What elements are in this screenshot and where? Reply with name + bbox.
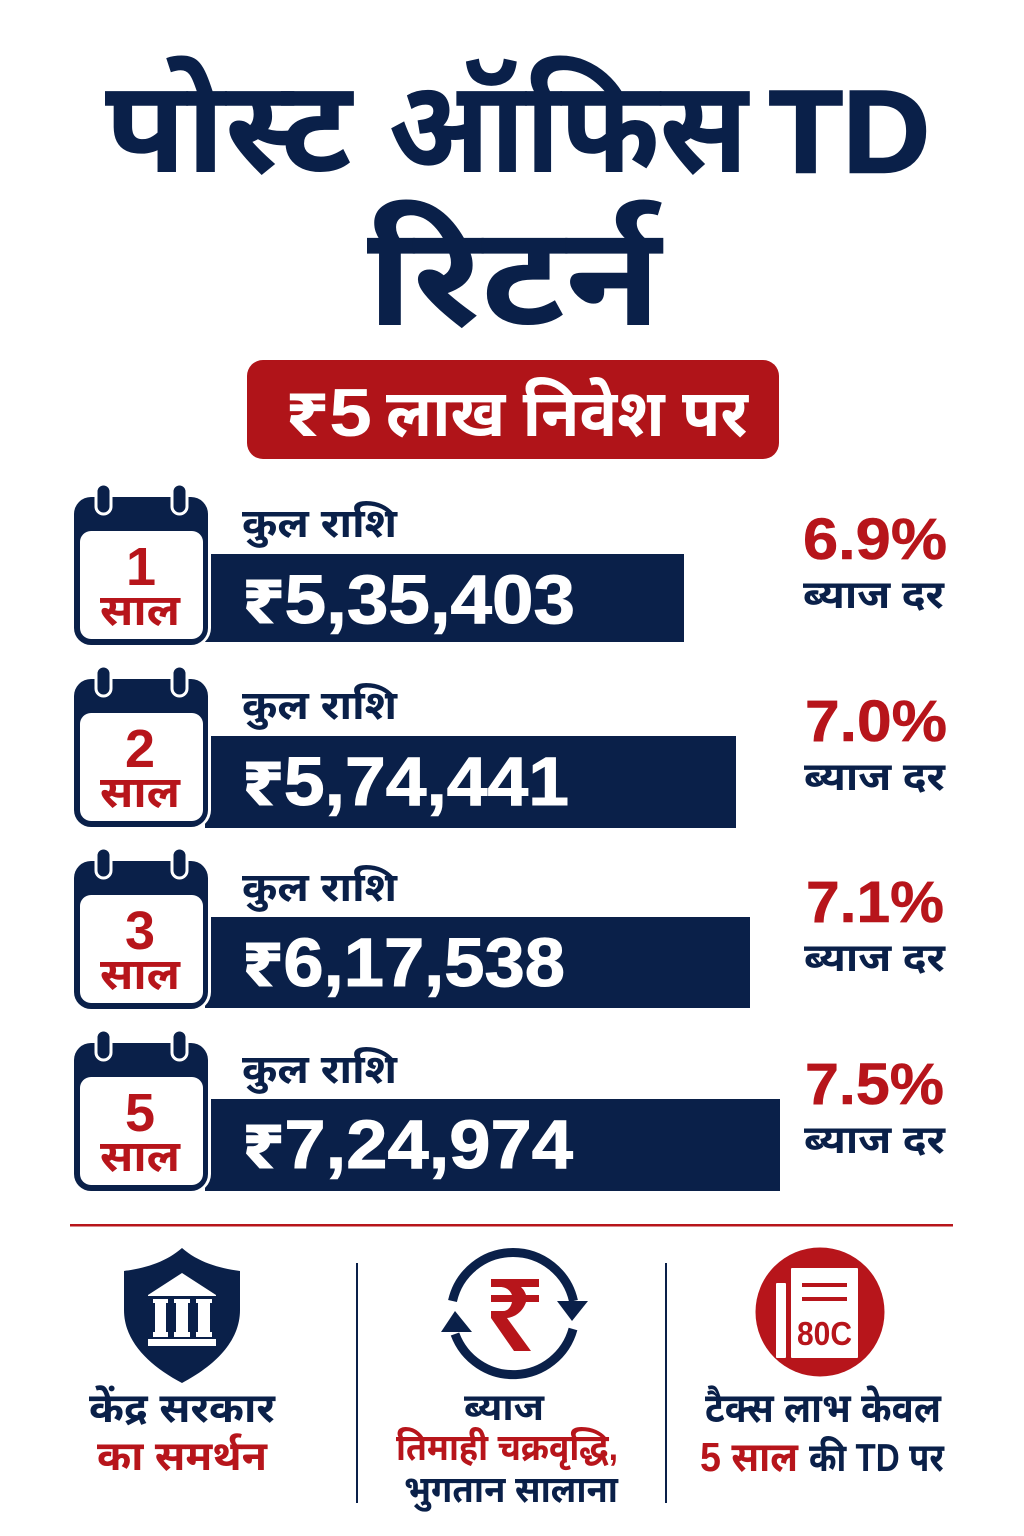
icon: calendar 1 year: [72, 484, 211, 647]
label: total amount: कुल राशि: [242, 865, 398, 912]
rate: 6.9 percent: 6.9%: [803, 507, 947, 572]
badge: investment amount: [247, 360, 779, 459]
rate: 7.0 percent: 7.0%: [805, 689, 947, 754]
rate: 6.9 percent: [803, 507, 947, 617]
icon: calendar 2 years: 2: [125, 719, 155, 779]
icon: 80C document: 80C: [797, 1315, 852, 1352]
bar: 1 year amount: ₹5,35,403: [242, 561, 575, 638]
caption: on 5 year TD: की TD पर: [809, 1436, 945, 1480]
bar: 3 year amount: [205, 917, 750, 1008]
icon: calendar 1 year: साल: [100, 587, 181, 635]
icon: calendar 5 years: 5: [125, 1083, 155, 1143]
row: 3 years: [72, 848, 946, 1011]
label: total amount: कुल राशि: [242, 501, 398, 548]
badge: investment amount: ₹5: [285, 375, 372, 451]
icon: calendar 3 years: साल: [100, 951, 181, 999]
caption: support: का समर्थन: [97, 1433, 268, 1479]
rate: 7.1 percent: ब्याज दर: [804, 937, 946, 980]
row: 1 year: [72, 484, 947, 647]
bar: 2 year amount: [205, 736, 736, 828]
icon: 80C document: [756, 1248, 884, 1376]
title: ऑफिस: [388, 54, 750, 200]
panel: interest compounding: [396, 1253, 619, 1512]
label: total amount: कुल राशि: [242, 1047, 398, 1094]
caption: on 5 year TD: [700, 1434, 945, 1480]
title: रिटर्न: [367, 198, 664, 355]
caption: on 5 year TD: 5 साल: [700, 1434, 799, 1480]
rate: 7.5 percent: ब्याज दर: [804, 1119, 946, 1162]
rate: 7.5 percent: [804, 1052, 946, 1162]
rate: 7.1 percent: 7.1%: [806, 870, 944, 935]
icon: calendar 5 years: [72, 1030, 211, 1193]
badge: investment amount: लाख निवेश पर: [386, 376, 750, 450]
icon: calendar 3 years: [72, 848, 211, 1011]
caption: quarterly compounding: तिमाही चक्रवृद्धि,: [396, 1427, 618, 1470]
bar: 1 year amount: [205, 554, 684, 642]
icon: calendar 1 year: 1: [126, 537, 156, 597]
rate: 7.0 percent: [804, 689, 947, 799]
title: [105, 54, 930, 355]
caption: central government: केंद्र सरकार: [89, 1385, 276, 1431]
caption: interest: ब्याज: [464, 1387, 545, 1429]
rate: 6.9 percent: ब्याज दर: [803, 574, 945, 617]
bar: 5 year amount: [205, 1099, 780, 1191]
rate: 7.0 percent: ब्याज दर: [804, 756, 946, 799]
title: पोस्ट: [105, 54, 354, 200]
icon: rupee with circular arrows: [441, 1253, 588, 1375]
icon: shield with bank: [124, 1248, 240, 1383]
panel: government backing: [89, 1248, 276, 1479]
row: 5 years: [72, 1030, 946, 1193]
bar: 5 year amount: ₹7,24,974: [242, 1106, 573, 1183]
rate: 7.5 percent: 7.5%: [805, 1052, 944, 1117]
rate: 7.1 percent: [804, 870, 946, 980]
icon: calendar 5 years: साल: [100, 1133, 181, 1181]
bar: 3 year amount: ₹6,17,538: [242, 924, 565, 1001]
label: total amount: कुल राशि: [242, 683, 398, 730]
bar: 2 year amount: ₹5,74,441: [242, 743, 569, 820]
panel: tax benefit: [700, 1248, 945, 1480]
caption: annual payment: भुगतान सालाना: [404, 1469, 619, 1512]
row: 2 years: [72, 666, 947, 829]
title: TD: [769, 66, 930, 197]
icon: calendar 2 years: साल: [100, 769, 181, 817]
icon: calendar 2 years: [72, 666, 211, 829]
caption: tax benefit only: टैक्स लाभ केवल: [705, 1384, 942, 1431]
icon: calendar 3 years: 3: [125, 901, 155, 961]
